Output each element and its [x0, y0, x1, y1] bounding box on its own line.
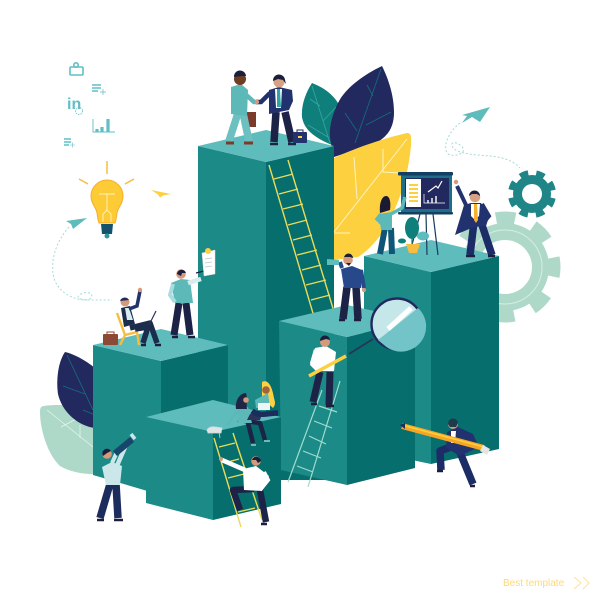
icon: teal gear [507, 169, 557, 219]
icon: list with plus [92, 85, 106, 95]
figure: man with magnifier [309, 335, 346, 406]
icon: yellow paper plane [151, 190, 171, 198]
icon: light bulb [79, 161, 134, 238]
column: middle [279, 305, 415, 485]
figure: man climbing ladder [219, 456, 269, 524]
ladder: yellow front [214, 433, 262, 527]
footer label [503, 577, 589, 589]
footer label: Best template [503, 578, 565, 589]
figure: man with giant pencil [400, 418, 490, 486]
icon: mint gear [448, 210, 562, 324]
figure: seated woman with laptop [227, 393, 270, 445]
leaf: mint left [40, 405, 100, 474]
figure: man with megaphone [327, 254, 366, 320]
icon: linkedin: in [67, 96, 81, 113]
icon: bar chart [93, 119, 115, 132]
figure: handshake man navy suit [255, 74, 296, 144]
icon: navy briefcase [293, 130, 307, 143]
icon: magnifying glass [349, 298, 426, 354]
icon: teal paper plane right [462, 107, 490, 123]
dashed flight path right [446, 123, 520, 168]
ladder: yellow long [269, 160, 335, 320]
leaf: navy [330, 66, 394, 157]
note with pin [202, 248, 215, 276]
leaf: teal [302, 83, 338, 145]
column: back right [364, 240, 499, 464]
icon: brown briefcase [103, 332, 118, 345]
ladder: mint [288, 381, 340, 487]
icon group: top left social icons [64, 63, 115, 147]
figure: woman at board [377, 196, 405, 256]
column: front [146, 400, 281, 520]
column: tallest [198, 130, 334, 480]
presentation board [398, 172, 453, 255]
leaf: navy left [57, 352, 95, 428]
figure: man with pencil at note [170, 269, 204, 337]
column: left [93, 329, 228, 495]
leaf: yellow [334, 133, 411, 260]
potted plant [398, 217, 429, 253]
figure: man with telescope [97, 434, 135, 520]
dashed flight path left [53, 227, 112, 300]
icon: small list [64, 139, 75, 148]
figure: seated woman blonde [252, 381, 278, 414]
icon: white cat [207, 427, 222, 438]
figure: man with cape [454, 180, 495, 256]
icon: location tablet [70, 63, 83, 75]
figure: man sitting with laptop [117, 288, 161, 345]
figure: handshake man teal suit [226, 70, 259, 143]
icon: teal paper plane left [66, 218, 87, 229]
